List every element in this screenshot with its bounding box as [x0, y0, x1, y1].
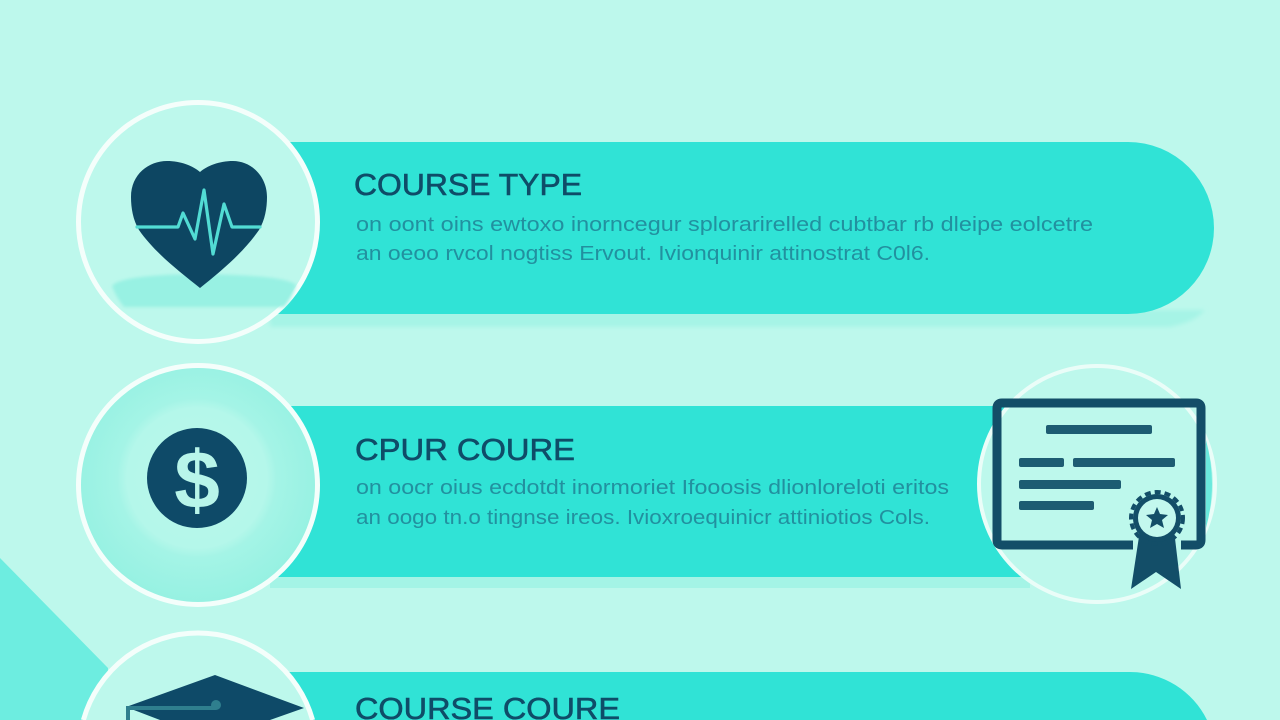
banner shadow: course type [270, 310, 1205, 327]
text block: cpur coure: an oogo tn.o tingnse ireos. Ivioxroequinicr attiniotios Cols. [356, 506, 930, 529]
text block: course type: an oeoo rvcol nogtiss Ervout. Ivionquinir attinostrat C0l6. [356, 242, 930, 265]
banner: course coure [285, 672, 1207, 720]
panel: course coure [83, 633, 1207, 720]
panel: course type [78, 102, 1214, 342]
banner shadow: cpur coure [270, 572, 1030, 588]
icon: dollar coin [147, 428, 247, 528]
banner: course type [270, 142, 1214, 314]
heading: cpur coure: CPUR COURE [355, 432, 575, 467]
text block: course type [356, 213, 1093, 265]
panel: cpur coure [78, 366, 1215, 604]
text block: cpur coure [356, 476, 949, 529]
right teal sliver [1206, 440, 1212, 528]
icon circle: graduation cap [83, 633, 313, 720]
icon: heart with pulse [131, 161, 267, 288]
icon circle: heart [78, 102, 318, 342]
icon: dollar coin: $ [174, 435, 220, 526]
decorative corner shape [0, 558, 108, 720]
floor shadow [112, 274, 296, 307]
icon circle: dollar [78, 366, 318, 604]
text block: course type: on oont oins ewtoxo inorncegur splorarirelled cubtbar rb dleipe eolcetre [356, 213, 1093, 236]
heading: course type: COURSE TYPE [354, 167, 582, 202]
icon circle: certificate [979, 366, 1215, 602]
text block: cpur coure: on oocr oius ecdotdt inormoriet Ifooosis dlionloreloti eritos [356, 476, 949, 499]
banner: cpur coure [270, 406, 1207, 577]
icon: graduation cap [126, 675, 304, 720]
icon: certificate with ribbon [997, 403, 1201, 589]
